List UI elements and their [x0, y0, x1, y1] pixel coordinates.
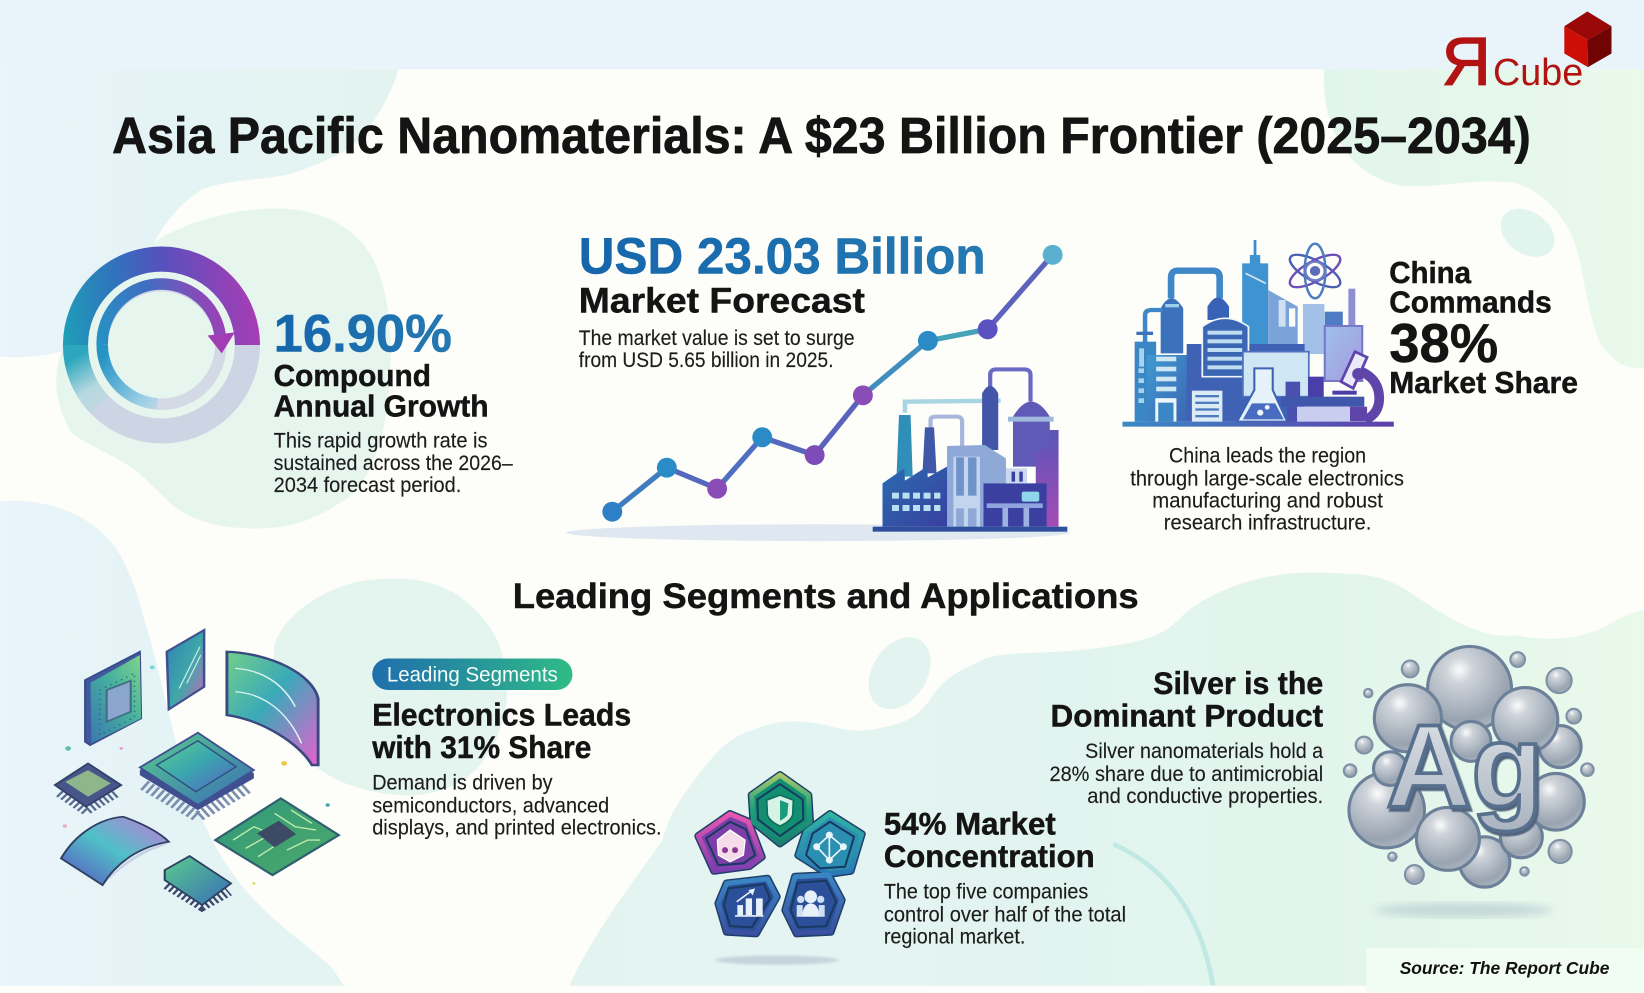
description — [884, 881, 1126, 949]
description: manufacturing and robust — [1152, 490, 1383, 513]
line chart — [602, 245, 1063, 522]
heading — [274, 359, 489, 423]
description: and conductive properties. — [1087, 785, 1323, 808]
heading: Electronics Leads — [372, 698, 631, 733]
description — [1130, 444, 1404, 535]
badge: leading segments — [372, 659, 572, 690]
icon: isometric chips and displays — [55, 630, 339, 907]
heading: Annual Growth — [274, 389, 489, 423]
description — [1050, 740, 1323, 808]
description — [579, 327, 855, 372]
description: displays, and printed electronics. — [372, 817, 662, 840]
heading — [1051, 666, 1324, 734]
section heading: Leading Segments and Applications — [513, 576, 1139, 616]
description: China leads the region — [1169, 444, 1366, 467]
source note: Source: The Report Cube — [1400, 958, 1609, 978]
heading: China — [1389, 256, 1472, 290]
heading: Compound — [274, 359, 431, 393]
heading: with 31% Share — [371, 730, 591, 765]
logo mark: red cube — [1564, 12, 1611, 67]
description: This rapid growth rate is — [274, 430, 488, 453]
heading: Concentration — [884, 839, 1095, 874]
panel: electronics segment — [55, 630, 662, 907]
description: The top five companies — [884, 881, 1088, 904]
logo: RCube: Cube — [1493, 51, 1583, 93]
description: research infrastructure. — [1164, 512, 1371, 535]
description: regional market. — [884, 926, 1025, 949]
description: 2034 forecast period. — [274, 474, 461, 497]
logo: RCube — [1442, 12, 1611, 100]
chart shadow base — [566, 524, 1069, 541]
source note — [1366, 948, 1644, 993]
heading: Commands — [1389, 285, 1552, 319]
description: through large-scale electronics — [1130, 467, 1404, 490]
heading: Market Forecast — [579, 280, 865, 320]
icon: silver nanoparticle cluster — [1344, 646, 1594, 918]
icon: five-company pentagon badge — [698, 775, 862, 965]
panel: market forecast — [566, 227, 1069, 541]
panel: China market share — [1123, 240, 1578, 535]
description: control over half of the total — [884, 904, 1126, 927]
heading: 38% — [1389, 313, 1498, 374]
panel: silver product — [1050, 646, 1594, 918]
icon: city, lab and microscope illustration — [1123, 240, 1394, 427]
heading — [884, 807, 1095, 874]
description: The market value is set to surge — [579, 327, 855, 350]
panel: compound annual growth — [75, 259, 513, 497]
heading: Silver is the — [1153, 666, 1323, 701]
heading: Market Share — [1389, 366, 1578, 400]
icon: progress ring with arrow — [75, 259, 247, 431]
heading — [1389, 256, 1578, 400]
description: Demand is driven by — [372, 772, 553, 795]
title: Asia Pacific Nanomaterials: A $23 Billion Frontier (2025–2034) — [112, 106, 1531, 164]
logo: RCube: Я — [1442, 24, 1491, 100]
icon: atom — [1285, 244, 1345, 298]
description — [372, 772, 662, 840]
icon: silver nanoparticle cluster: Ag — [1386, 700, 1543, 831]
description: 28% share due to antimicrobial — [1050, 763, 1323, 786]
heading: 54% Market — [884, 807, 1056, 842]
heading: Dominant Product — [1051, 699, 1324, 734]
panel: market forecast: USD 23.03 Billion — [579, 227, 986, 285]
icon: factory — [873, 369, 1067, 532]
description: from USD 5.65 billion in 2025. — [579, 349, 834, 372]
description — [274, 430, 513, 497]
badge: leading segments: Leading Segments — [387, 664, 558, 687]
description: semiconductors, advanced — [372, 795, 609, 818]
panel: market concentration — [698, 775, 1126, 965]
heading — [371, 698, 631, 765]
description: Silver nanomaterials hold a — [1085, 740, 1323, 763]
panel: compound annual growth: 16.90% — [274, 305, 452, 363]
description: sustained across the 2026– — [274, 452, 513, 475]
